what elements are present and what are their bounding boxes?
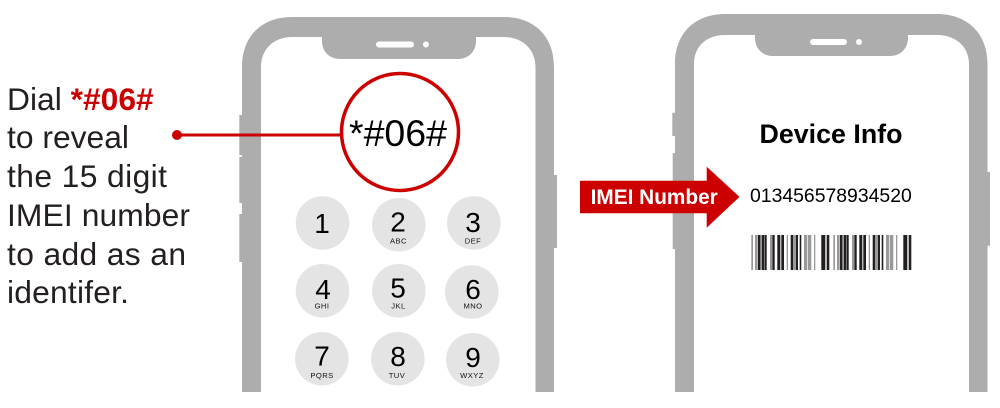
keypad: ABC	[390, 236, 407, 245]
dial code circle	[342, 74, 458, 190]
instruction text: Dial *#06#	[7, 81, 154, 117]
phone: dial screen	[239, 17, 557, 392]
barcode	[751, 235, 911, 270]
keypad: 8	[390, 341, 406, 372]
instruction text: to reveal	[7, 119, 129, 155]
keypad: 7	[314, 341, 330, 372]
keypad: PQRS	[310, 371, 334, 380]
keypad: 4	[315, 274, 331, 305]
keypad: WXYZ	[460, 371, 484, 380]
keypad: 1	[314, 208, 330, 239]
keypad: DEF	[465, 236, 481, 245]
keypad	[295, 196, 501, 387]
heading: device info: Device Info	[760, 119, 902, 149]
keypad: 6	[465, 274, 481, 305]
keypad: 9	[465, 342, 481, 373]
keypad: JKL	[391, 302, 406, 310]
arrow: IMEI number: IMEI Number	[591, 186, 718, 209]
instruction text: IMEI number	[7, 197, 190, 233]
arrow: IMEI number	[580, 167, 740, 228]
dial code circle: *#06#	[349, 112, 447, 154]
instruction text: to add as an	[7, 236, 186, 272]
IMEI digits: 013456578934520	[750, 185, 912, 207]
callout line	[172, 130, 342, 140]
keypad: 5	[390, 272, 406, 304]
instruction text: identifer.	[7, 274, 129, 310]
keypad: MNO	[463, 302, 483, 310]
instruction text	[7, 81, 190, 310]
keypad: GHI	[315, 302, 329, 310]
instruction text: the 15 digit	[7, 158, 167, 194]
keypad: 2	[390, 207, 406, 238]
phone: device info screen	[672, 14, 990, 392]
keypad: TUV	[389, 371, 406, 380]
keypad: 3	[465, 207, 481, 238]
